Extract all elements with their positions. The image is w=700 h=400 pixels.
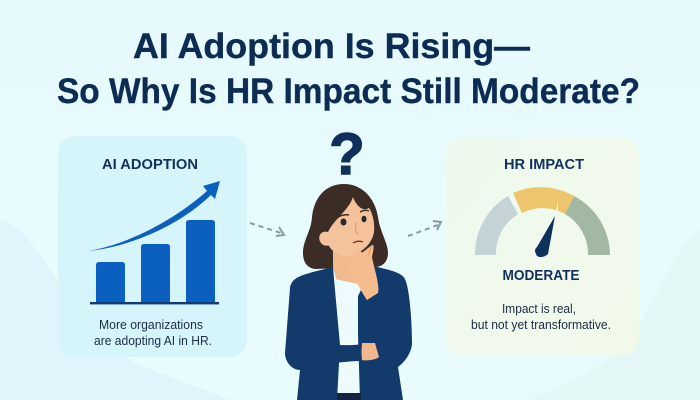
title: AI Adoption Is Rising— bbox=[133, 27, 530, 66]
arrow: person to impact bbox=[408, 221, 441, 236]
jacket bbox=[285, 267, 340, 400]
panel: AI adoption bbox=[58, 136, 247, 357]
caption: AI adoption bbox=[94, 318, 212, 348]
title: So Why Is HR Impact Still Moderate? bbox=[57, 72, 640, 111]
icon: rising arrow bbox=[88, 181, 220, 251]
hair bbox=[303, 184, 388, 269]
icon: question mark: ? bbox=[329, 122, 365, 187]
caption: HR impact: but not yet transformative. bbox=[471, 318, 611, 332]
caption: HR impact: Impact is real, bbox=[502, 302, 576, 316]
person bbox=[285, 184, 412, 400]
panel: HR impact bbox=[446, 137, 639, 356]
title bbox=[57, 27, 640, 111]
neck and chest bbox=[333, 250, 368, 284]
icon: needle bbox=[535, 216, 555, 257]
arrow: adoption to person bbox=[250, 223, 284, 236]
face bbox=[319, 197, 374, 256]
caption: AI adoption: More organizations bbox=[99, 318, 203, 332]
caption: AI adoption: are adopting AI in HR. bbox=[94, 334, 212, 348]
caption: HR impact bbox=[471, 302, 611, 332]
bar chart bbox=[90, 220, 219, 304]
heading: AI adoption: AI ADOPTION bbox=[102, 157, 198, 173]
gauge label: MODERATE bbox=[502, 267, 580, 284]
facial features bbox=[337, 210, 369, 243]
shirt bbox=[335, 279, 361, 394]
folded arm and hand bbox=[300, 245, 410, 370]
gauge bbox=[475, 187, 610, 257]
heading: HR impact: HR IMPACT bbox=[504, 157, 584, 173]
